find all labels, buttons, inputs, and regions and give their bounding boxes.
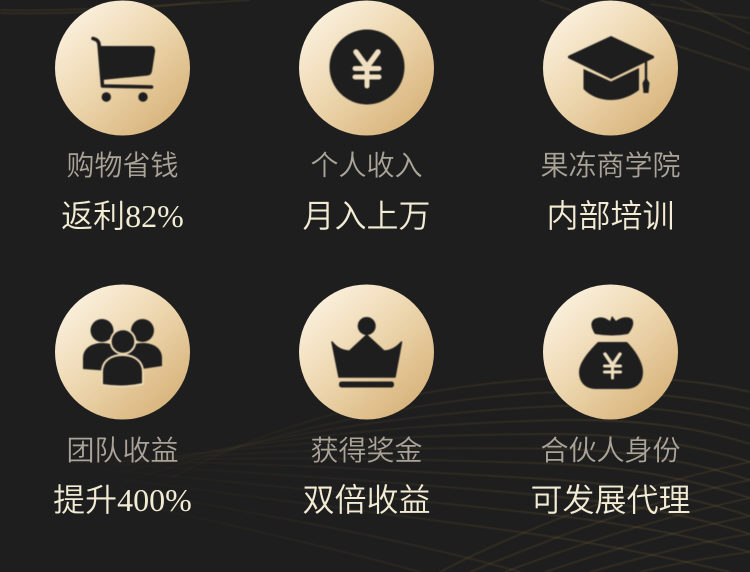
value: agent: 可发展代理	[530, 482, 690, 518]
label: team earnings: 团队收益	[66, 428, 178, 468]
label: personal income: 个人收入	[310, 144, 422, 184]
value: monthly income: 月入上万	[302, 198, 430, 234]
icon: shopping cart	[55, 0, 190, 136]
label: business school: 果冻商学院	[540, 144, 680, 184]
icon: money bag	[543, 284, 678, 420]
label: partner status: 合伙人身份	[540, 428, 680, 468]
label: shopping savings: 购物省钱	[66, 144, 178, 184]
icon: yen coin	[299, 0, 434, 136]
value: internal training: 内部培训	[546, 198, 674, 234]
value: double earnings: 双倍收益	[302, 482, 430, 518]
value: rebate 82%: 返利82%	[61, 198, 184, 234]
icon: graduation cap	[543, 0, 678, 136]
icon: team of people	[55, 284, 190, 420]
icon: crown	[299, 284, 434, 420]
label: bonus: 获得奖金	[310, 428, 422, 468]
value: boost 400%: 提升400%	[53, 482, 192, 518]
